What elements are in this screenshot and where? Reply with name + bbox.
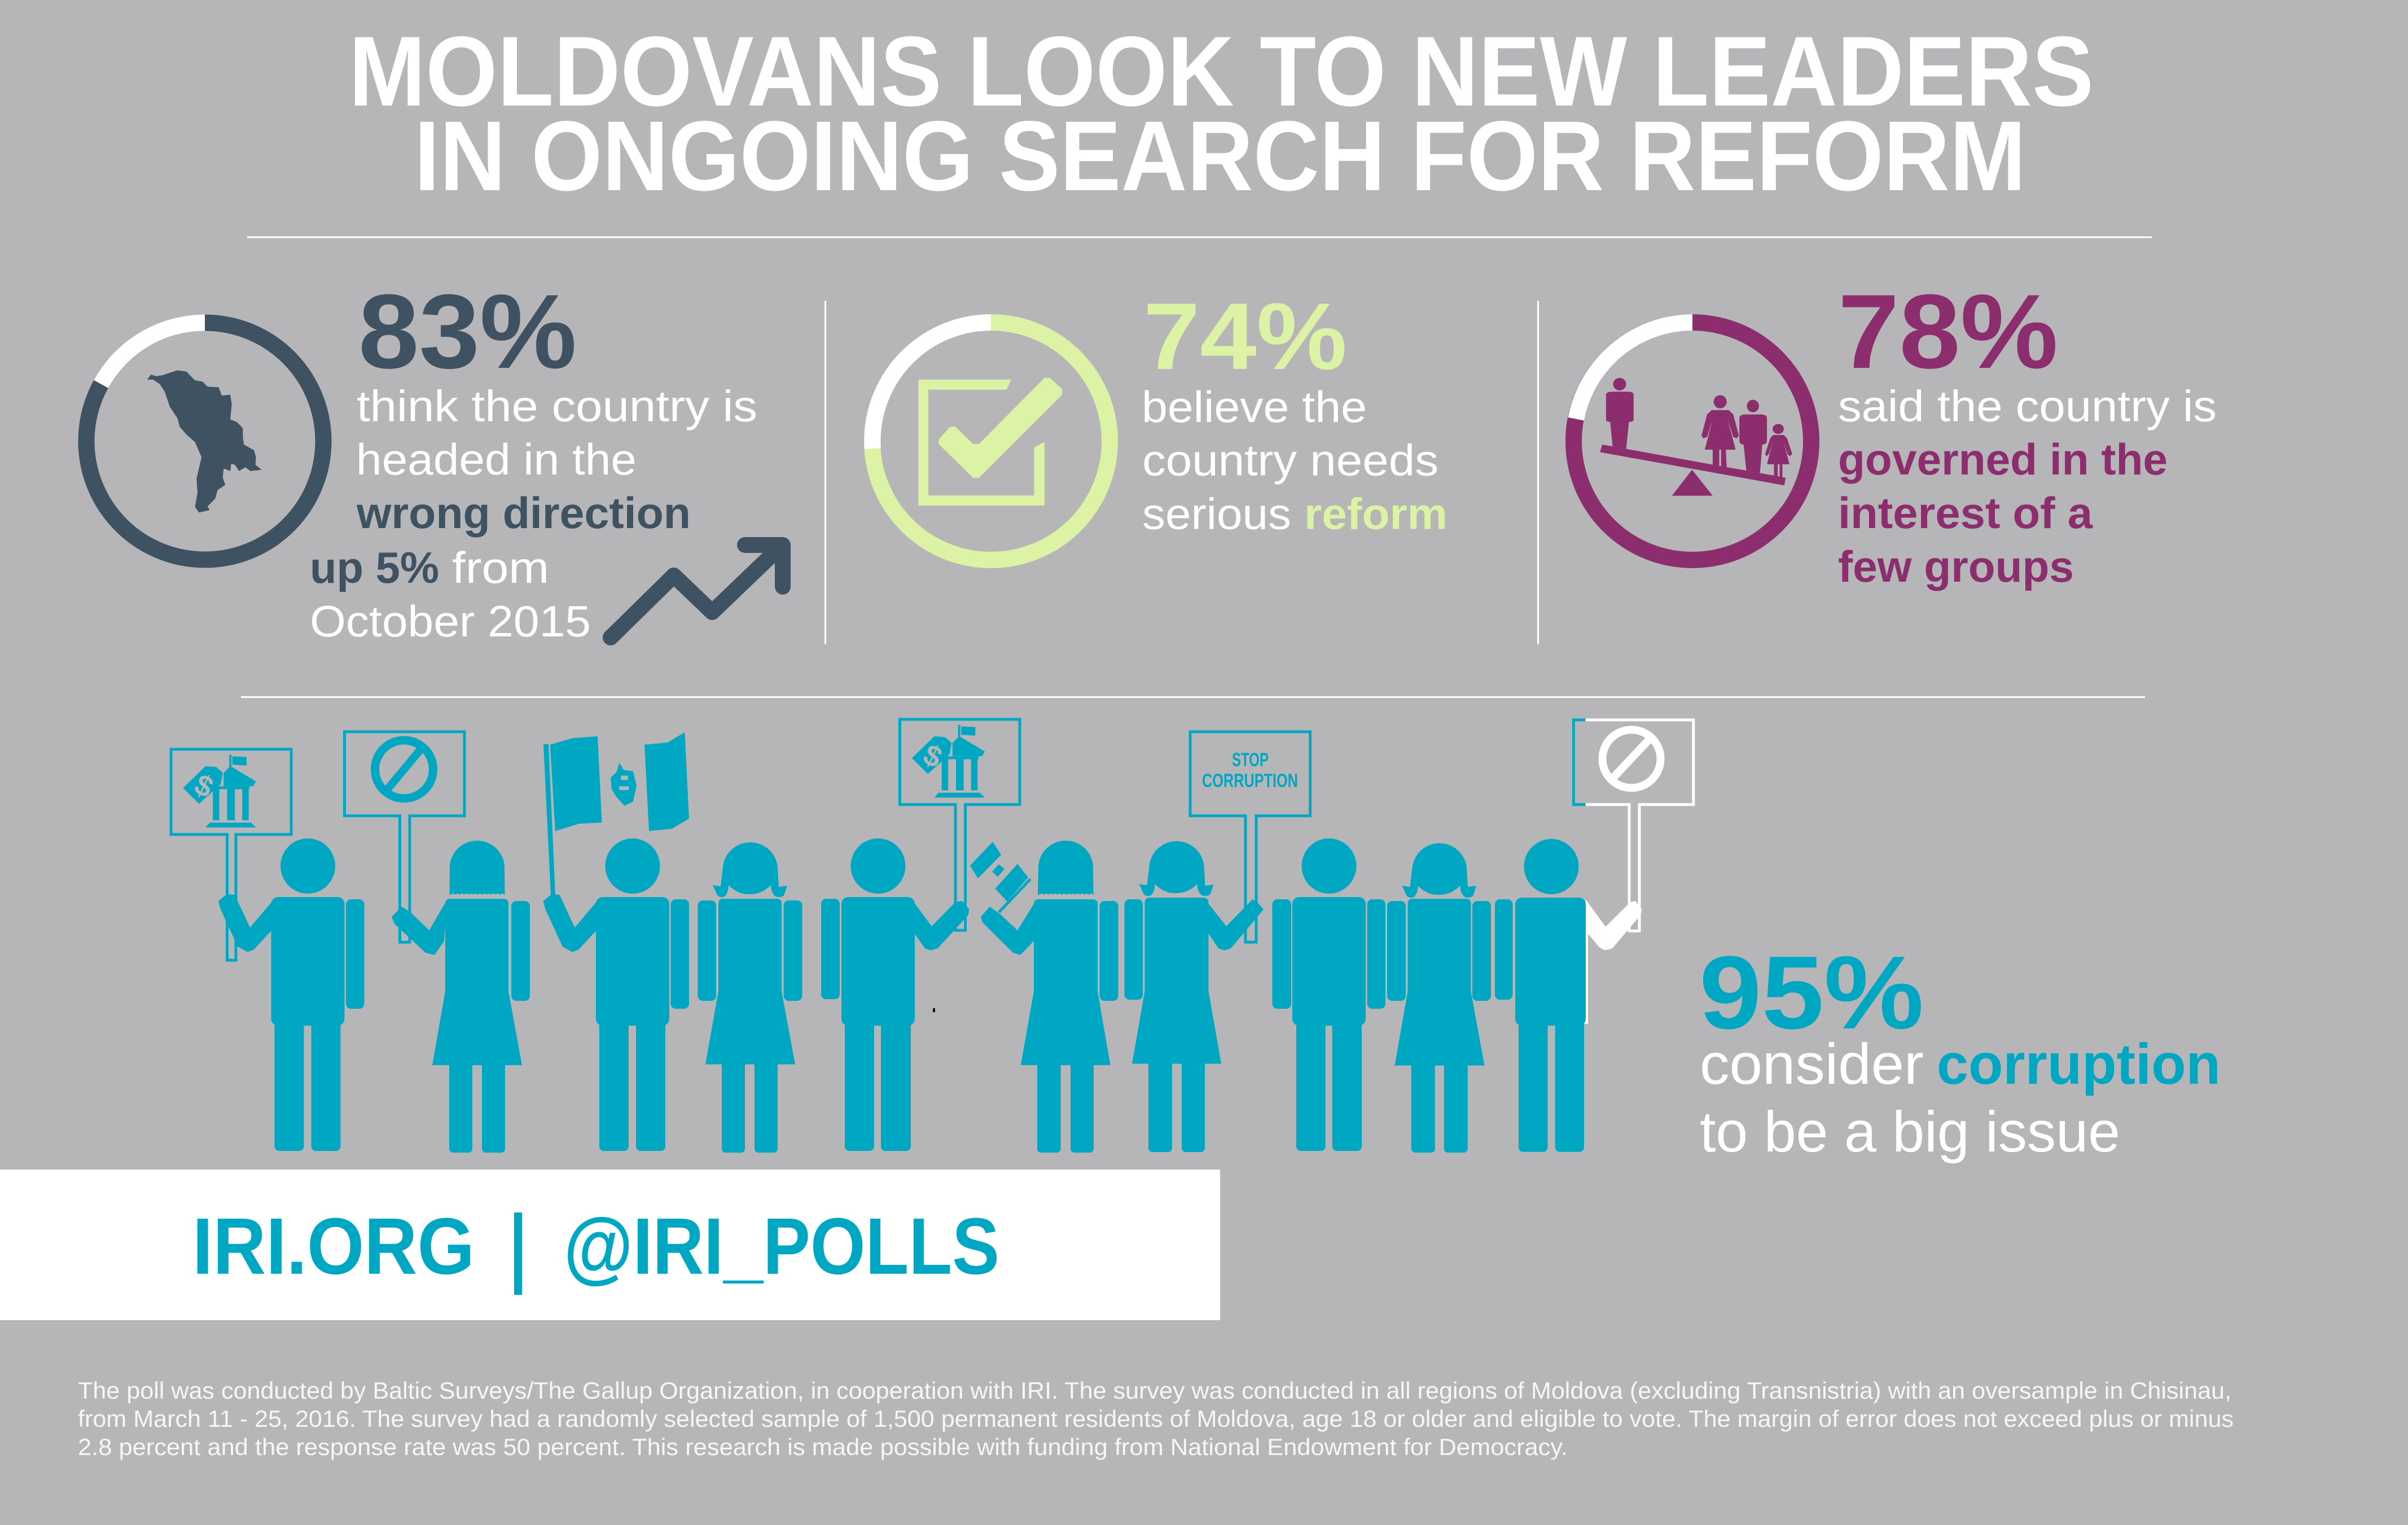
- text block: wrong direction: wrong direction: [356, 488, 691, 538]
- footnote: methodology: [78, 1377, 2234, 1460]
- text block: wrong direction: from: [452, 543, 549, 592]
- text block: needs reform: [1142, 382, 1448, 538]
- text block: wrong direction: headed in the: [356, 434, 637, 484]
- text block: few groups: governed in the: [1838, 434, 2168, 484]
- figure: man: [1272, 838, 1385, 1151]
- text block: corruption big issue: to be a big issue: [1700, 1100, 2120, 1164]
- text block: corruption big issue: [1700, 1032, 2221, 1164]
- figure: woman: [698, 842, 802, 1153]
- banner: website and handle: IRI.ORG: [192, 1202, 475, 1291]
- footnote: methodology: 2.8 percent and the response rate was 50 percent. This research is made possible with funding from National Endowment for Democracy.: [78, 1434, 1568, 1460]
- icon: map of Moldova: [147, 370, 261, 513]
- figure: woman with stop corruption sign: [1124, 732, 1310, 1152]
- title: MOLDOVANS LOOK TO NEW LEADERS: [349, 16, 2094, 127]
- icon: check box: [918, 378, 1062, 506]
- panel: 83 percent wrong direction: [86, 273, 783, 646]
- sign: building with price tag: [900, 719, 1020, 930]
- sign: building with price tag: $: [918, 738, 947, 775]
- sign: stop corruption: STOP: [1232, 749, 1269, 771]
- icon: rising arrow: [611, 545, 783, 638]
- donut chart: 83 percent: [86, 323, 323, 560]
- banner: website and handle: @IRI_POLLS: [564, 1202, 999, 1291]
- donut chart: 78 percent: [1573, 323, 1812, 560]
- text block: few groups: few groups: [1838, 542, 2074, 591]
- text block: few groups: [1838, 381, 2217, 591]
- text block: wrong direction: think the country is: [357, 381, 757, 431]
- sign: building with price tag: $: [190, 768, 218, 805]
- text block: wrong direction: October 2015: [310, 596, 591, 646]
- panel: 95 percent corruption: [1699, 934, 2221, 1164]
- figure: woman: [1387, 843, 1491, 1153]
- stat: 95%: 95%: [1699, 934, 1924, 1051]
- donut chart: 74 percent: [872, 323, 1109, 560]
- stat: 74%: 74%: [1143, 283, 1347, 389]
- text block: few groups: interest of a: [1838, 488, 2093, 538]
- text block: corruption big issue: corruption: [1937, 1032, 2221, 1096]
- text block: needs reform: reform: [1304, 489, 1448, 538]
- text block: needs reform: country needs: [1142, 436, 1438, 485]
- text block: wrong direction: up 5%: [310, 543, 439, 592]
- panel: 74 percent need reform: [872, 283, 1448, 560]
- banner: website and handle: [0, 1170, 1220, 1320]
- figure: man with building sign: [171, 749, 365, 1151]
- title: IN ONGOING SEARCH FOR REFORM: [414, 101, 2026, 212]
- figure: man with white arm and sign: [1495, 720, 1694, 1152]
- text block: needs reform: serious: [1142, 489, 1291, 538]
- panel: 78 percent few groups: [1573, 273, 2217, 591]
- text block: few groups: said the country is: [1838, 381, 2217, 431]
- sign: stop corruption: CORRUPTION: [1202, 770, 1298, 792]
- stat: 78%: 78%: [1838, 273, 2058, 390]
- sign: building with price tag: [171, 749, 291, 960]
- sign: stop corruption: [1190, 732, 1310, 942]
- stat: 83%: 83%: [358, 273, 577, 390]
- flag: Moldova: [543, 732, 689, 895]
- flag: small Moldova: [970, 842, 1030, 912]
- text block: wrong direction: [310, 381, 757, 646]
- figure: woman with small flag: [970, 841, 1119, 1153]
- sign: white prohibition: [1573, 720, 1694, 931]
- footnote: methodology: from March 11 - 25, 2016. The survey had a randomly selected sample of 1,500 permanent residents of Moldova, age 18 or older and eligible to vote. The margin of error does not exceed plus or minus: [78, 1405, 2234, 1432]
- text block: corruption big issue: consider: [1700, 1032, 1924, 1096]
- icon: seesaw with people: [1600, 378, 1792, 496]
- sign: prohibition: [344, 732, 464, 942]
- figure: woman with prohibition sign: [344, 732, 530, 1153]
- title: [349, 16, 2094, 212]
- footnote: methodology: The poll was conducted by Baltic Surveys/The Gallup Organization, in cooperation with IRI. The survey was conducted in all regions of Moldova (excluding Transnistria) with an oversample in Chisinau,: [78, 1377, 2231, 1404]
- panel: crowd of protesters: [171, 719, 1694, 1153]
- figure: man with building sign, centre: [821, 719, 1020, 1151]
- text block: needs reform: believe the: [1142, 382, 1367, 432]
- figure: man with flag: [543, 732, 689, 1151]
